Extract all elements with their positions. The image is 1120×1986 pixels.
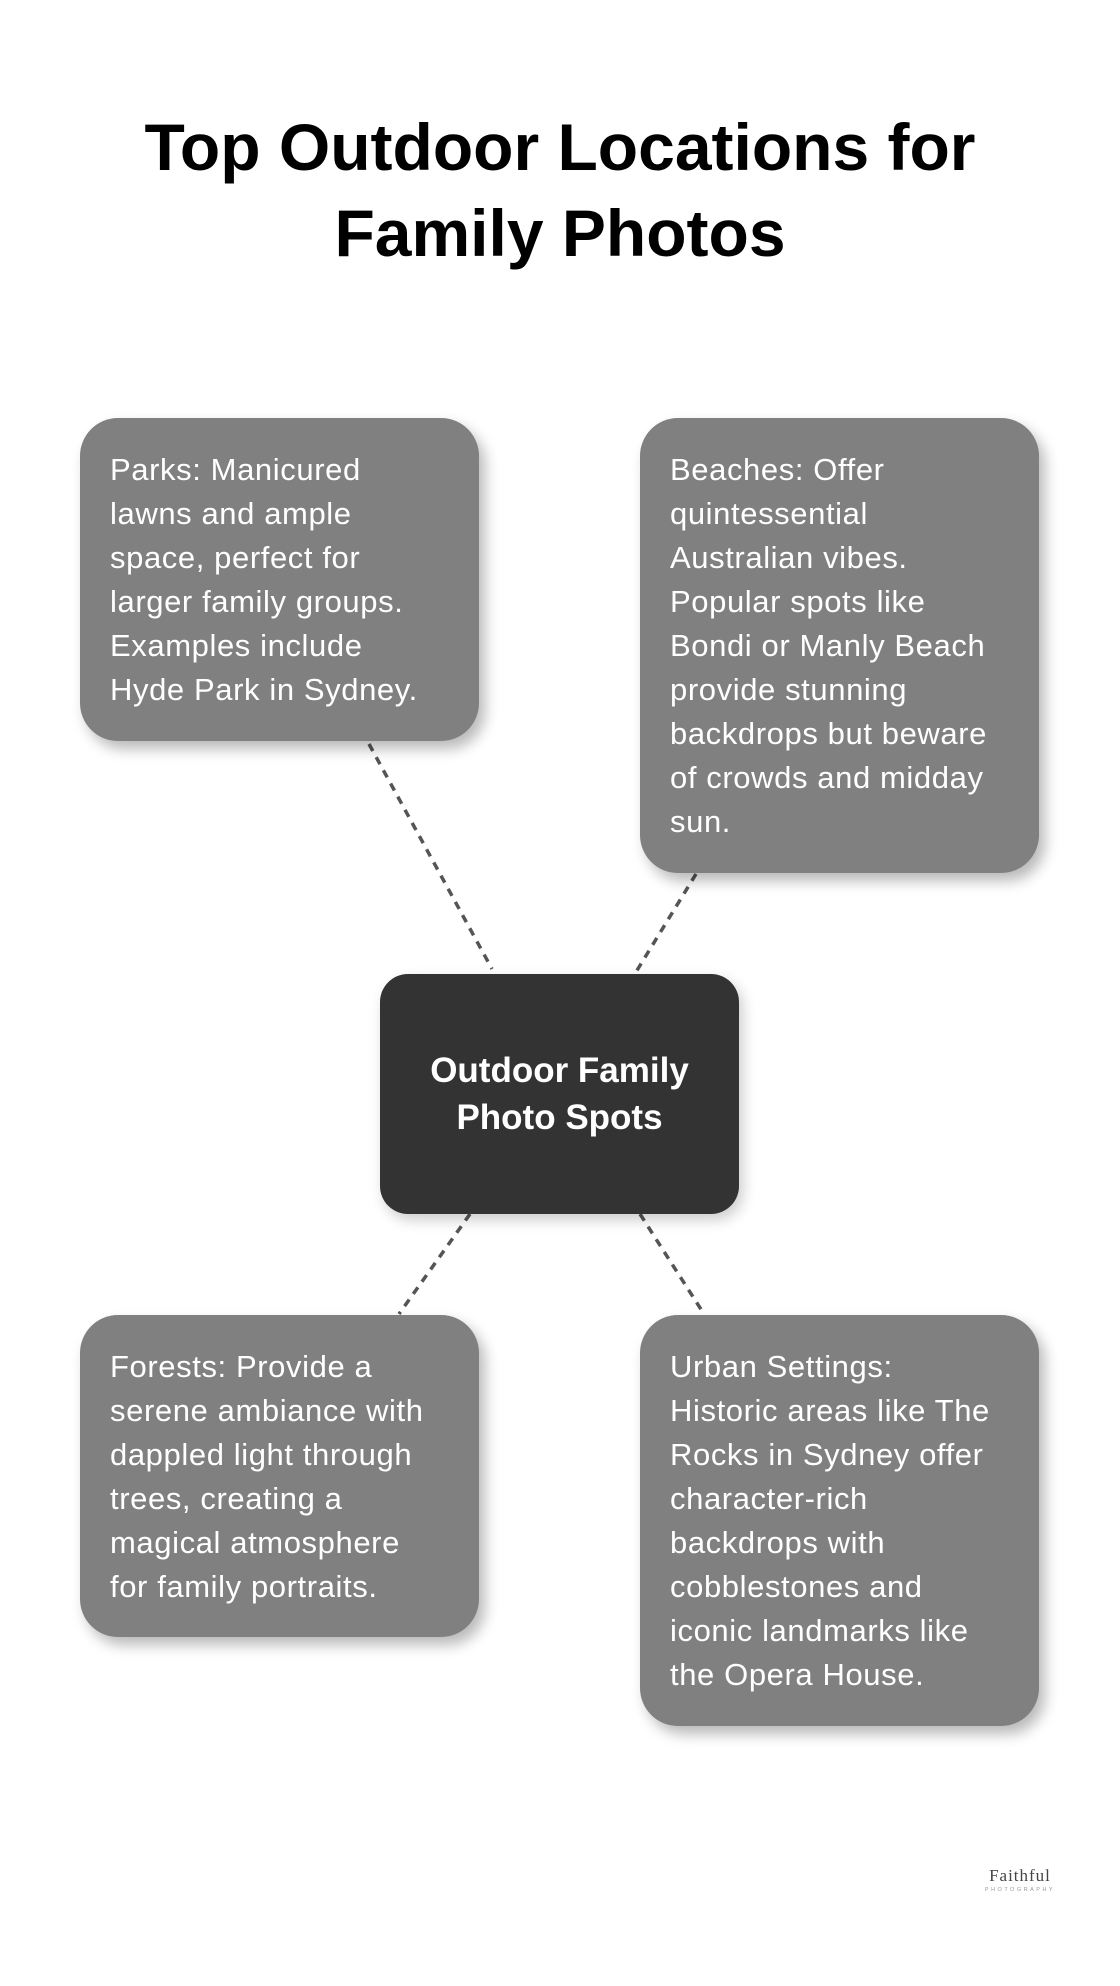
panel: beaches bbox=[640, 418, 1039, 873]
panel: urban settings: the Opera House. bbox=[670, 1657, 924, 1692]
logo: Faithful bbox=[989, 1866, 1051, 1885]
panel: urban settings: cobblestones and bbox=[670, 1569, 923, 1604]
title: Family Photos bbox=[334, 196, 786, 270]
panel: urban settings: Urban Settings: bbox=[670, 1349, 893, 1384]
panel: forests bbox=[80, 1315, 479, 1637]
panel: beaches: provide stunning bbox=[670, 672, 907, 707]
panel: urban settings: character-rich bbox=[670, 1481, 868, 1516]
panel: forests: trees, creating a bbox=[110, 1481, 342, 1516]
panel: beaches: Popular spots like bbox=[670, 584, 926, 619]
panel: beaches: backdrops but beware bbox=[670, 716, 987, 751]
panel: urban settings: iconic landmarks like bbox=[670, 1613, 969, 1648]
panel: urban settings: backdrops with bbox=[670, 1525, 885, 1560]
panel: beaches: of crowds and midday bbox=[670, 760, 984, 795]
panel: parks: Examples include bbox=[110, 628, 363, 663]
panel: parks: Hyde Park in Sydney. bbox=[110, 672, 418, 707]
title: Top Outdoor Locations for bbox=[144, 110, 976, 184]
panel: parks: Parks: Manicured bbox=[110, 452, 361, 487]
arrow: urban connector bbox=[640, 1214, 704, 1314]
center node: Photo Spots bbox=[456, 1098, 663, 1137]
panel: forests: for family portraits. bbox=[110, 1569, 378, 1604]
panel: forests: dappled light through bbox=[110, 1437, 412, 1472]
center node: Outdoor Family bbox=[430, 1051, 689, 1090]
panel: forests: serene ambiance with bbox=[110, 1393, 424, 1428]
panel: beaches: Australian vibes. bbox=[670, 540, 908, 575]
panel: urban settings bbox=[640, 1315, 1039, 1726]
arrow: beaches connector bbox=[636, 874, 696, 972]
panel: beaches: Beaches: Offer bbox=[670, 452, 885, 487]
panel: urban settings: Historic areas like The bbox=[670, 1393, 990, 1428]
center node bbox=[380, 974, 739, 1214]
panel: parks: space, perfect for bbox=[110, 540, 360, 575]
panel: parks: lawns and ample bbox=[110, 496, 352, 531]
arrow: forests connector bbox=[399, 1214, 470, 1314]
title bbox=[144, 110, 976, 270]
panel: beaches: quintessential bbox=[670, 496, 868, 531]
panel: urban settings: Rocks in Sydney offer bbox=[670, 1437, 984, 1472]
logo: PHOTOGRAPHY bbox=[985, 1887, 1055, 1893]
logo bbox=[985, 1866, 1055, 1893]
panel: parks: larger family groups. bbox=[110, 584, 403, 619]
panel: forests: Forests: Provide a bbox=[110, 1349, 372, 1384]
panel: parks bbox=[80, 418, 479, 741]
panel: forests: magical atmosphere bbox=[110, 1525, 400, 1560]
panel: beaches: Bondi or Manly Beach bbox=[670, 628, 985, 663]
arrow: parks connector bbox=[369, 744, 492, 969]
panel: beaches: sun. bbox=[670, 804, 731, 839]
